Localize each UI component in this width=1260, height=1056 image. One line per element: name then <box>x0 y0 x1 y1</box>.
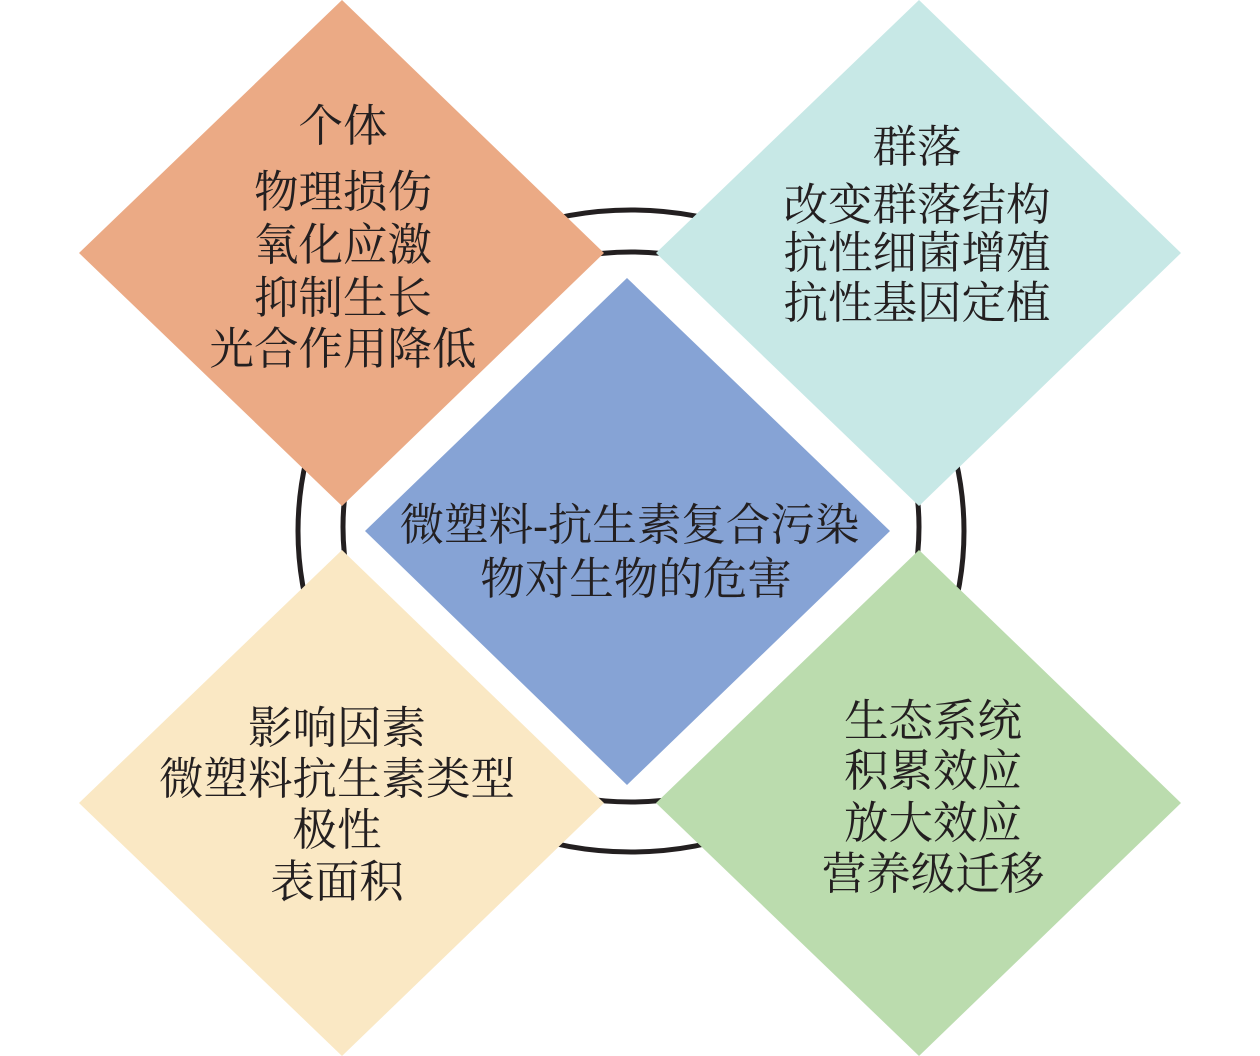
panel: community <box>656 0 1181 506</box>
heading: community: 群落 <box>872 122 962 172</box>
text block: factors list: 极性 <box>292 805 382 855</box>
outer ring <box>298 210 964 852</box>
text block: ecosystem effects: 积累效应 <box>844 746 1022 796</box>
text block: factors list: 微塑料抗生素类型 <box>159 754 515 804</box>
text block: community effects: 改变群落结构 <box>783 180 1051 230</box>
text block: individual effects <box>209 167 477 374</box>
heading: influencing factors: 影响因素 <box>248 703 426 753</box>
text block: ecosystem effects <box>822 746 1044 899</box>
panel: influencing factors <box>79 550 604 1056</box>
text block: factors list: 表面积 <box>270 857 405 907</box>
text block: community effects: 抗性基因定植 <box>783 278 1051 328</box>
inner ring <box>343 252 919 802</box>
panel: individual <box>79 0 604 506</box>
text block: individual effects: 氧化应激 <box>254 220 432 270</box>
text block: ecosystem effects: 营养级迁移 <box>822 849 1044 899</box>
heading: ecosystem: 生态系统 <box>844 696 1022 746</box>
text block: community effects: 抗性细菌增殖 <box>783 228 1051 278</box>
panel: central topic <box>365 278 890 785</box>
title: 物对生物的危害 <box>480 554 792 604</box>
panel: ecosystem <box>656 550 1181 1056</box>
text block: ecosystem effects: 放大效应 <box>844 798 1022 848</box>
text block: factors list <box>159 754 515 907</box>
title: 微塑料-抗生素复合污染 <box>400 500 859 550</box>
title <box>400 500 859 604</box>
text block: individual effects: 物理损伤 <box>254 167 432 217</box>
heading: individual: 个体 <box>298 101 388 151</box>
text block: individual effects: 抑制生长 <box>254 273 432 323</box>
text block: individual effects: 光合作用降低 <box>209 324 477 374</box>
text block: community effects <box>783 180 1051 328</box>
